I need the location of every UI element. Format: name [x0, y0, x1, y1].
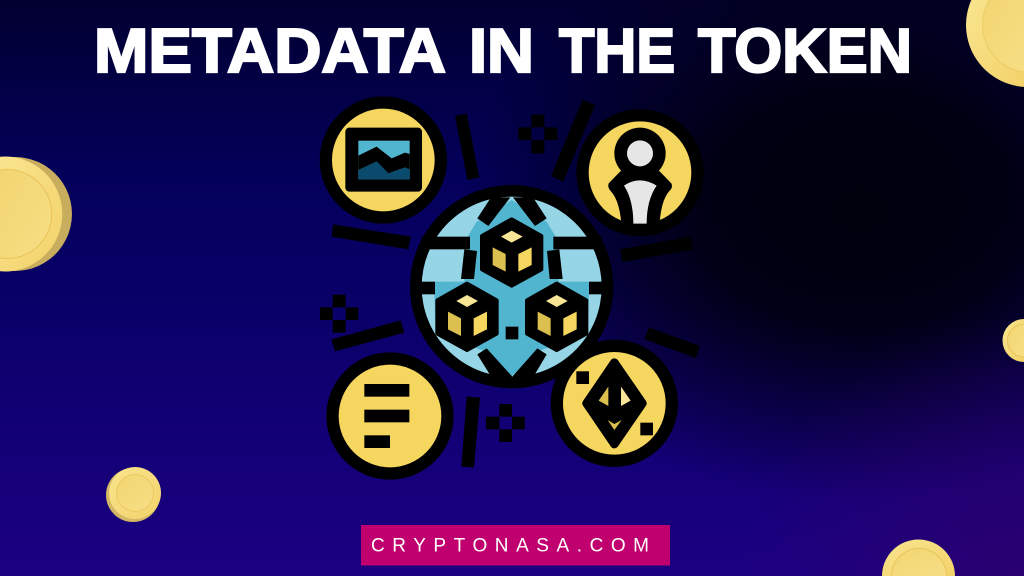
coin: bottom right — [882, 540, 955, 576]
title: METADATA — [94, 17, 446, 86]
icon: person badge — [518, 99, 704, 262]
icon: text lines badge — [320, 295, 525, 480]
central icon: blockchain globe network — [320, 96, 704, 480]
title: TOKEN — [698, 17, 912, 86]
block: lower left — [437, 284, 497, 350]
coin: right edge — [1002, 319, 1024, 362]
block: lower right — [527, 284, 586, 350]
footer badge — [361, 525, 670, 566]
coin: bottom left — [106, 467, 161, 522]
title: THE — [559, 17, 675, 86]
title: IN — [469, 17, 534, 86]
coin: left — [0, 156, 72, 271]
icon: image badge — [320, 96, 479, 249]
block: top — [482, 219, 541, 286]
icon: ethereum badge — [551, 327, 700, 467]
title — [94, 17, 912, 86]
icon: globe with three blocks — [410, 185, 613, 388]
coin: top right — [966, 0, 1024, 87]
footer website text: CRYPTONASA.COM — [371, 536, 649, 556]
